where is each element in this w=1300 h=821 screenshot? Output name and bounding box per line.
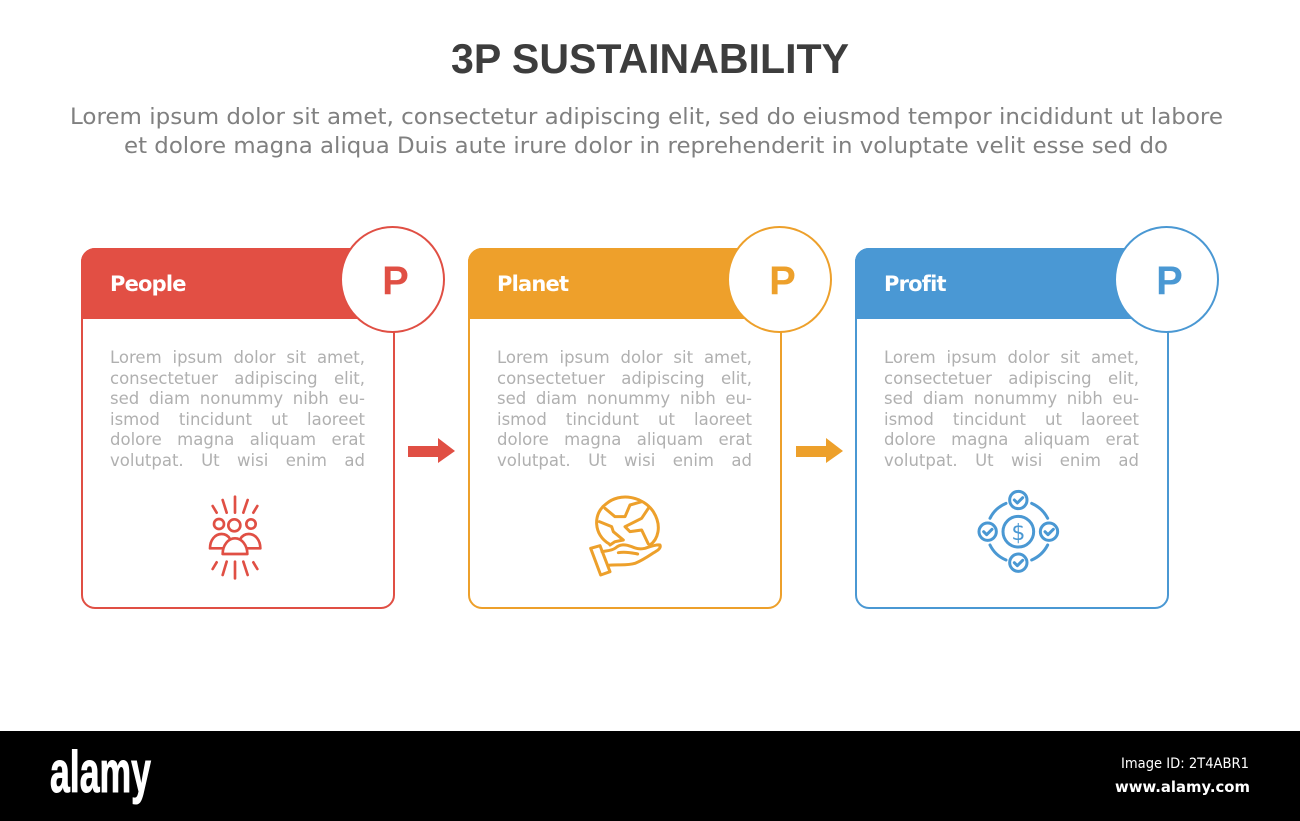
profit body text [884, 348, 1139, 470]
people body text: consectetuer adipiscing elit, [110, 369, 365, 388]
people heading: People [110, 272, 186, 296]
profit heading: Profit [884, 272, 946, 296]
icon: globe on hand [589, 496, 662, 576]
subtitle text block: Lorem ipsum dolor sit amet, consectetur adipiscing elit, sed do eiusmod tempor incididunt ut labore [70, 104, 1223, 130]
subtitle text block [70, 104, 1223, 159]
footer band [0, 731, 1300, 821]
people body text [110, 348, 365, 470]
panel: planet [468, 226, 832, 609]
planet body text: ismod tincidunt ut laoreet [497, 410, 752, 429]
profit body text: Lorem ipsum dolor sit amet, [884, 348, 1139, 367]
icon: dollar with checkmarks: $ [1011, 521, 1025, 546]
planet letter badge: P [769, 259, 796, 303]
icon: people group [208, 495, 262, 580]
subtitle text block: et dolore magna aliqua Duis aute irure dolor in reprehenderit in voluptate velit esse sed do [124, 133, 1168, 159]
planet body text [497, 348, 752, 470]
planet heading: Planet [497, 272, 568, 296]
icon: dollar with checkmarks [978, 490, 1060, 573]
profit header band [855, 248, 1169, 319]
arrow: people to planet [408, 438, 455, 463]
panel: people [81, 226, 445, 609]
profit letter badge [1114, 226, 1219, 333]
planet body text: Lorem ipsum dolor sit amet, [497, 348, 752, 367]
people body text: volutpat. Ut wisi enim ad [110, 451, 365, 470]
image id: Image ID: 2T4ABR1 [1121, 756, 1249, 772]
people body text: Lorem ipsum dolor sit amet, [110, 348, 365, 367]
profit letter badge: P [1156, 259, 1183, 303]
panel: profit [855, 226, 1219, 609]
planet letter badge [727, 226, 832, 333]
people body text: dolore magna aliquam erat [110, 430, 365, 449]
people letter badge [340, 226, 445, 333]
planet body text: dolore magna aliquam erat [497, 430, 752, 449]
profit body text: ismod tincidunt ut laoreet [884, 410, 1139, 429]
profit body text: sed diam nonummy nibh eu- [884, 389, 1139, 408]
people letter badge: P [382, 259, 409, 303]
profit card outline [855, 248, 1169, 609]
arrow: planet to profit [796, 438, 843, 463]
people body text: sed diam nonummy nibh eu- [110, 389, 365, 408]
planet body text: sed diam nonummy nibh eu- [497, 389, 752, 408]
image id: www.alamy.com [1115, 778, 1250, 796]
title: 3P SUSTAINABILITY [451, 35, 849, 82]
profit body text: dolore magna aliquam erat [884, 430, 1139, 449]
profit body text: consectetuer adipiscing elit, [884, 369, 1139, 388]
planet body text: volutpat. Ut wisi enim ad [497, 451, 752, 470]
profit body text: volutpat. Ut wisi enim ad [884, 451, 1139, 470]
brand logo: alamy [50, 740, 151, 805]
people header band [81, 248, 395, 319]
people body text: ismod tincidunt ut laoreet [110, 410, 365, 429]
planet header band [468, 248, 782, 319]
planet body text: consectetuer adipiscing elit, [497, 369, 752, 388]
image id [1115, 756, 1250, 796]
planet card outline [468, 248, 782, 609]
people card outline [81, 248, 395, 609]
